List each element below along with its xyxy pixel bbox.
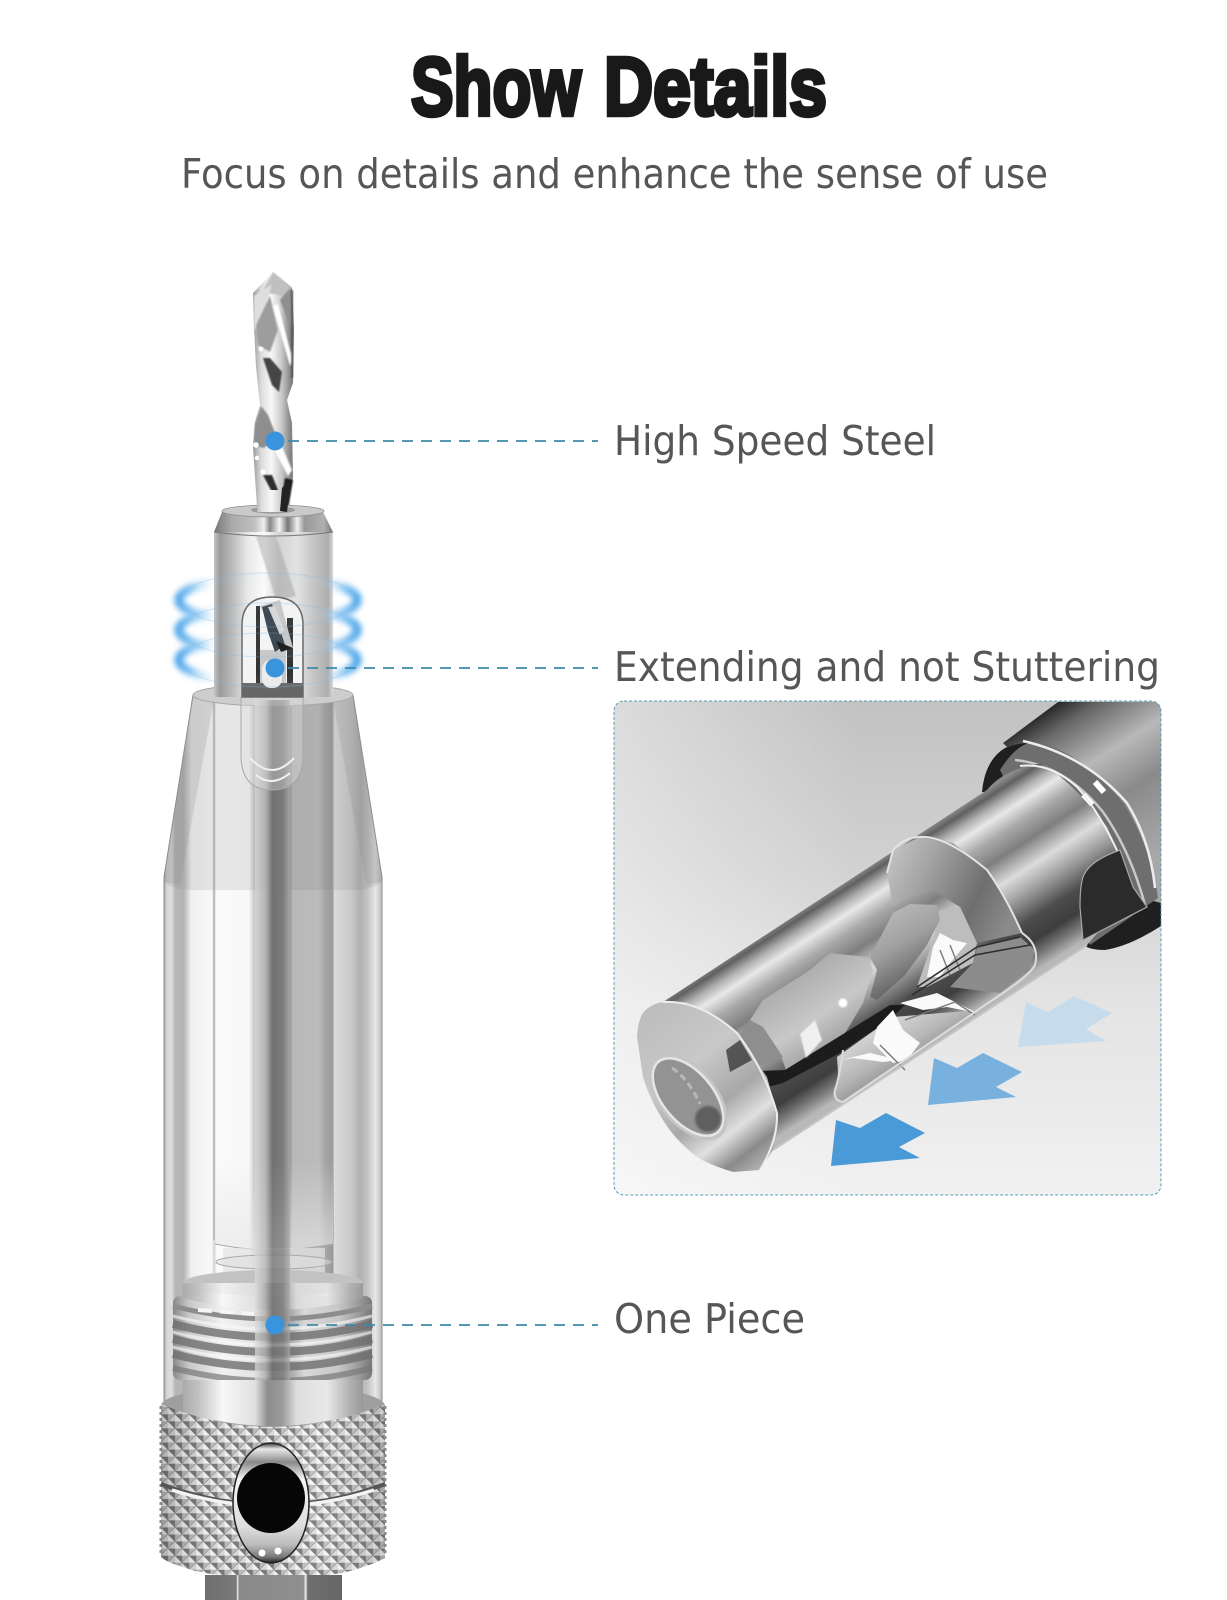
upper flute: [870, 904, 940, 1000]
title: [411, 40, 827, 133]
title: Details: [604, 40, 827, 133]
drill base over collar: [257, 490, 290, 512]
infographic canvas: [160, 52, 1162, 1600]
hex shank: [205, 1575, 342, 1600]
countersink drill bit illustration: [161, 272, 385, 1600]
knurled collar: [161, 1380, 385, 1579]
callout: one piece: [266, 1295, 805, 1343]
slot tail in tube: [241, 697, 303, 790]
dark flange: [982, 743, 1028, 792]
callout: high speed steel: High Speed Steel: [614, 417, 936, 465]
rear shank: [1003, 702, 1161, 910]
right lobe: [950, 937, 1035, 993]
threaded collar: [173, 1270, 372, 1381]
vibration rings: [179, 573, 357, 687]
tip through glass: [726, 1040, 752, 1072]
glass barrel: [663, 763, 1135, 1150]
inner drill bit: [723, 904, 1035, 1090]
tip cone: [740, 1020, 783, 1066]
callout: extending and not stuttering: [266, 643, 1160, 691]
side hole: [233, 1443, 309, 1563]
upper sleeve: [214, 505, 333, 697]
clear outer tube: [164, 684, 382, 1405]
dark end window: [1080, 850, 1147, 940]
dark tip shadow: [762, 1005, 905, 1086]
detail panel: extending mechanism: [614, 701, 1161, 1195]
central rod: [255, 700, 290, 1395]
slot window: [242, 597, 303, 697]
callout: extending and not stuttering: Extending and not Stuttering: [614, 643, 1160, 691]
callout: one piece: One Piece: [614, 1295, 805, 1343]
lower glass with shards: [835, 933, 1000, 1102]
lower dark flange: [1083, 900, 1161, 950]
inner cylinder body: [183, 1282, 363, 1430]
lower neck inside tube: [215, 1160, 333, 1296]
title: Show: [411, 40, 581, 133]
nose: [637, 1002, 777, 1172]
glass ball land: [750, 953, 873, 1073]
subtitle: Focus on details and enhance the sense of use: [181, 150, 1048, 198]
front hole: [652, 1057, 727, 1140]
blue direction arrows: [831, 996, 1112, 1166]
glass hump: [887, 837, 1022, 943]
drill tip: [253, 272, 294, 510]
callout: high speed steel: [266, 417, 936, 465]
window behind flute: [917, 907, 977, 987]
glass ring: [1000, 741, 1158, 945]
helical glass edges: [912, 937, 1030, 995]
